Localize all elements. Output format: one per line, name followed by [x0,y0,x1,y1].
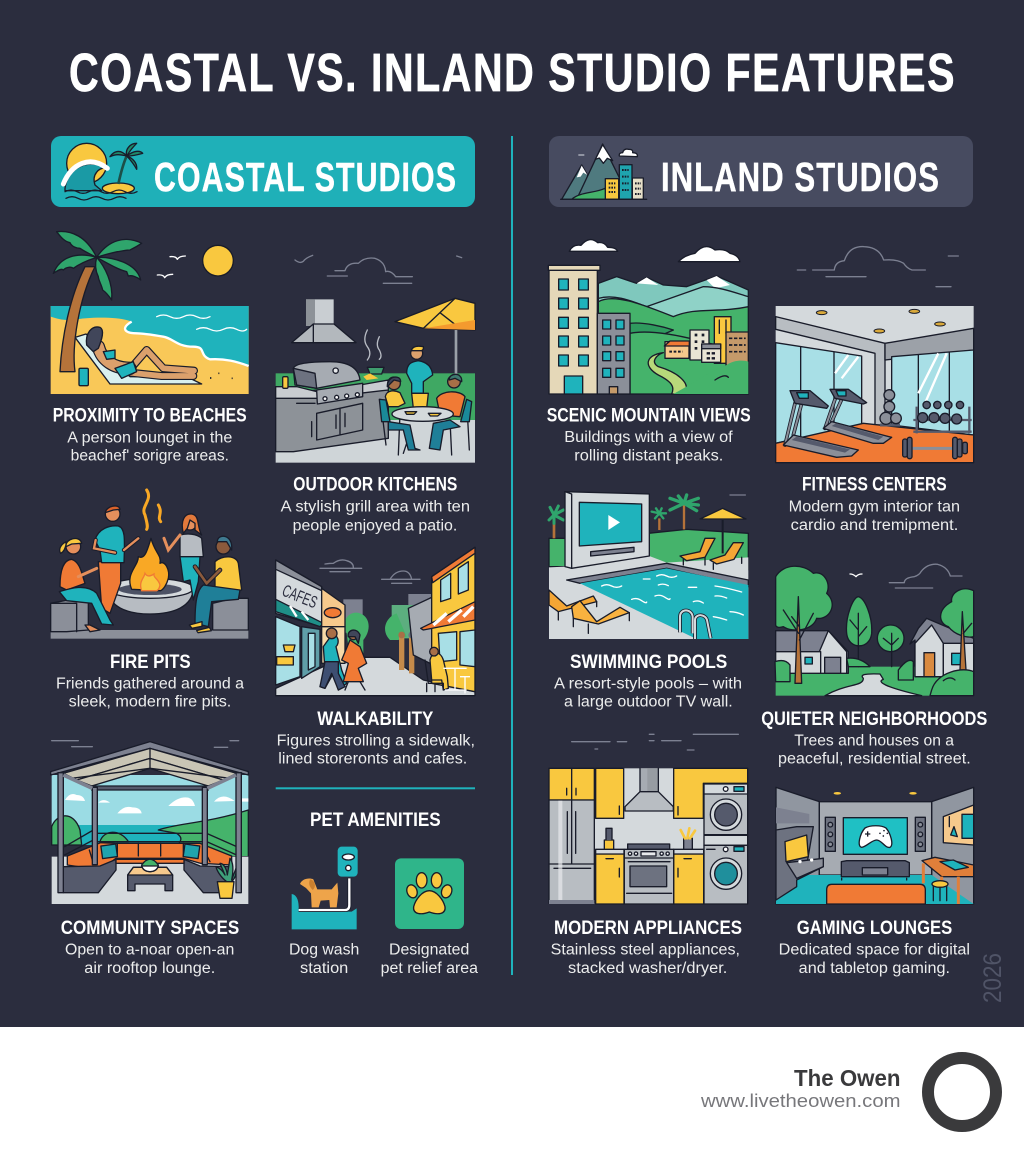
illustration: kitchen with stacked washer dryer [549,734,748,904]
icon: mountains and city [561,144,647,199]
feature: community spaces [51,741,248,977]
feature: proximity to beaches [51,231,249,465]
feature: outdoor kitchens [276,255,475,534]
footer [0,1027,1024,1154]
description: A stylish grill area with ten [281,499,470,516]
illustration: beach lounger [51,231,249,394]
heading: PROXIMITY TO BEACHES [53,406,247,427]
description: cardio and tremipment. [791,517,958,534]
heading: QUIETER NEIGHBORHOODS [761,709,987,730]
description: Dedicated space for digital [779,942,970,959]
caption: dog wash station: station [300,960,348,977]
caption: pet relief area: pet relief area [381,960,478,977]
description: Open to a-noar open-an [65,942,234,959]
caption: pet relief area: Designated [389,942,469,959]
heading: PET AMENITIES [310,810,441,831]
brand name: The Owen [794,1065,900,1091]
description: and tabletop gaming. [799,960,950,977]
description: rolling distant peaks. [574,448,723,465]
logo ring [928,1058,996,1126]
description: peaceful, residential street. [778,751,971,768]
icon: paw print [395,858,464,929]
description: sleek, modern fire pits. [69,694,231,711]
year label: 2026 [979,953,1007,1003]
description: air rooftop lounge. [84,960,215,977]
description: a large outdoor TV wall. [564,694,733,711]
panel: coastal header [51,136,475,207]
description: Friends gathered around a [56,675,244,692]
description: Modern gym interior tan [789,499,960,516]
description: people enjoyed a patio. [293,517,457,534]
illustration: buildings and mountains [548,240,748,394]
heading: WALKABILITY [317,709,434,730]
description: A resort-style pools – with [554,675,742,692]
panel: inland header [549,136,973,207]
description: Stainless steel appliances, [551,942,740,959]
icon: wave, sun and island [63,143,143,200]
description: Trees and houses on a [794,732,954,749]
illustration: trees and houses [775,564,974,696]
illustration: rooftop pergola lounge [51,741,248,904]
website: www.livetheowen.com [700,1090,900,1111]
feature: walkability [276,547,475,768]
illustration: grill and patio [276,255,475,463]
feature: fire pits [51,490,248,711]
heading: MODERN APPLIANCES [554,918,742,939]
description: Figures strolling a sidewalk, [277,732,475,749]
feature: modern appliances [549,734,748,977]
illustration: gym interior [776,247,974,463]
label: inland studios: INLAND STUDIOS [661,154,940,200]
heading: SCENIC MOUNTAIN VIEWS [547,406,751,427]
description: beachef' sorigre areas. [71,448,229,465]
heading: COMMUNITY SPACES [61,918,239,939]
heading: OUTDOOR KITCHENS [293,475,457,496]
feature: gaming lounges [776,787,974,977]
caption: dog wash station: Dog wash [289,942,359,959]
icon: dog wash station [292,847,358,929]
heading: FITNESS CENTERS [802,475,947,496]
panel: pet amenities [276,787,478,977]
heading: FIRE PITS [110,652,191,673]
label: coastal studios: COASTAL STUDIOS [154,154,457,200]
heading: SWIMMING POOLS [570,652,727,673]
feature: quieter neighborhoods [761,564,987,768]
description: Buildings with a view of [564,429,733,446]
illustration: friends around fire pit [51,490,248,639]
illustration: game room [776,787,974,904]
description: lined storeronts and cafes. [278,751,467,768]
illustration: pool and outdoor TV wall [549,492,748,639]
feature: fitness centers [776,247,974,534]
heading: GAMING LOUNGES [797,918,952,939]
feature: scenic mountain views [547,240,751,465]
center divider [511,136,513,975]
cafes sign: CAFES [280,581,320,612]
feature: swimming pools [549,492,748,711]
description: stacked washer/dryer. [568,960,727,977]
description: A person lounget in the [67,430,232,447]
illustration: street with cafes [276,547,475,696]
